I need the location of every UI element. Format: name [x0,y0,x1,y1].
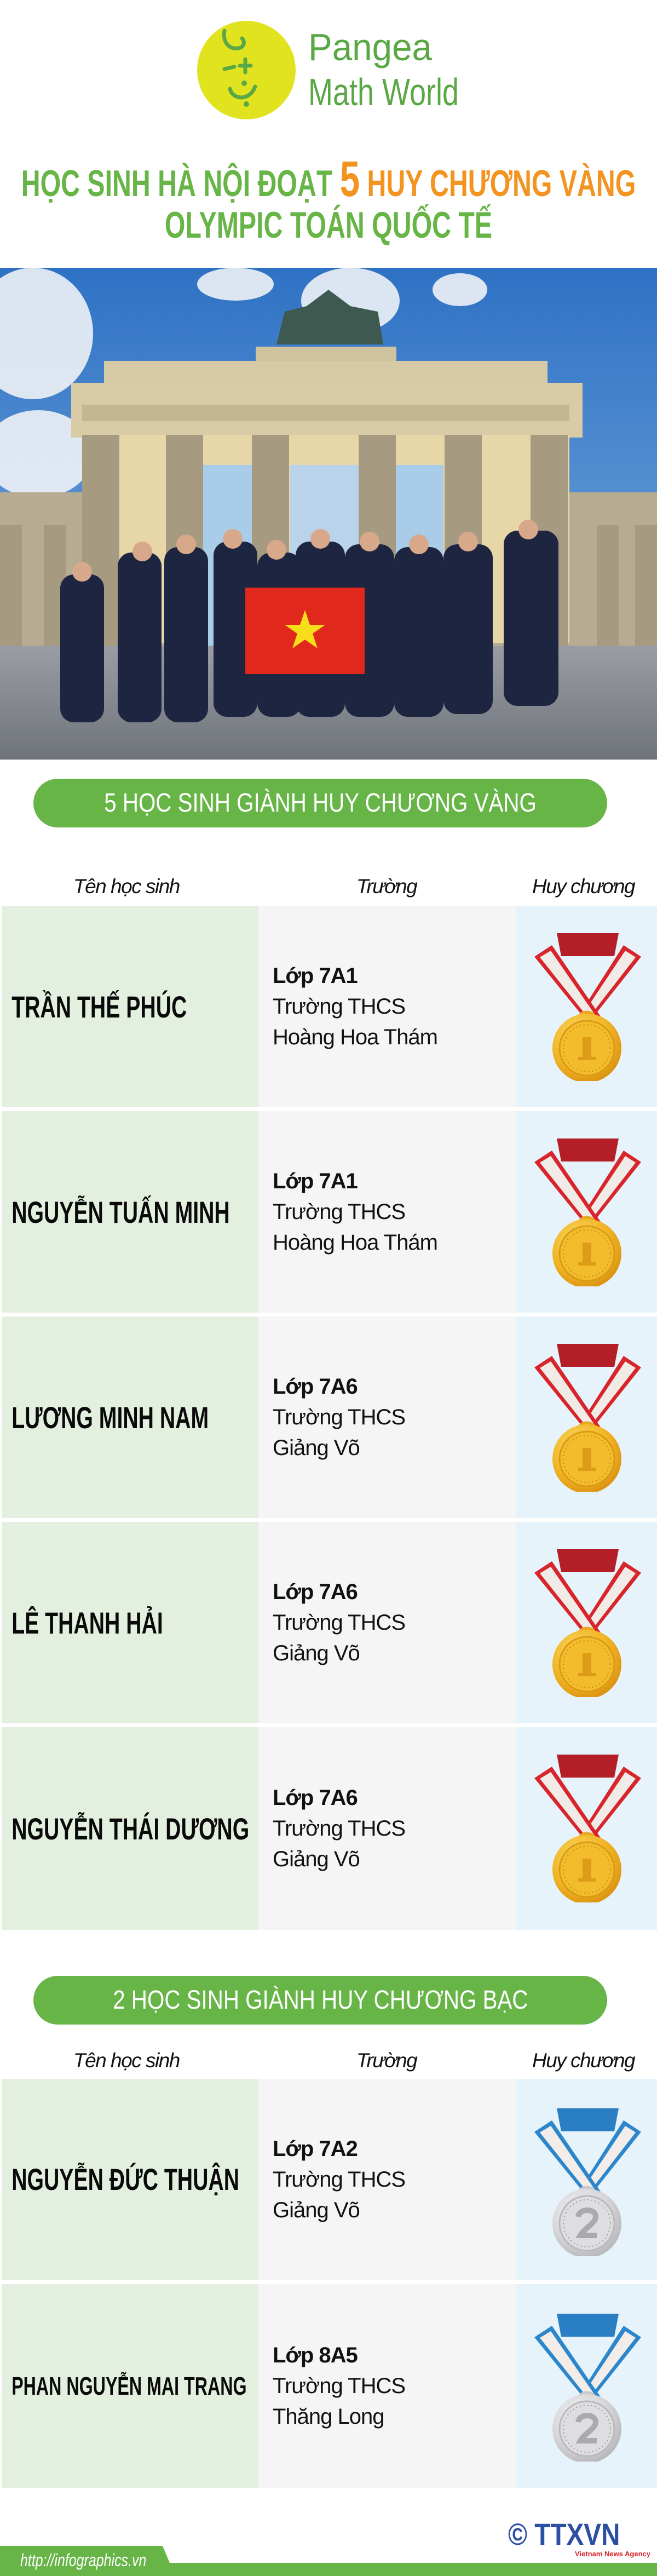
row: Nguyễn Thái Dương: NGUYỄN THÁI DƯƠNG [11,1812,249,1845]
row: Phan Nguyễn Mai Trang [2,2284,657,2488]
row: Trần Thế Phúc: TRẦN THẾ PHÚC [11,989,187,1024]
row: Phan Nguyễn Mai Trang: Lớp 8A5 [273,2343,358,2367]
row: Phan Nguyễn Mai Trang: Thăng Long [273,2405,384,2429]
table header: silver: Huy chương [532,2049,635,2072]
footer tab: website: http://infographics.vn [20,2550,146,2570]
row: Lương Minh Nam: Trường THCS [273,1405,405,1429]
row: Nguyễn Đức Thuận: Trường THCS [273,2167,405,2192]
logo text [308,26,459,113]
icon: gold medal [516,1522,657,1723]
row: Nguyễn Đức Thuận: NGUYỄN ĐỨC THUẬN [11,2162,239,2196]
row: Nguyễn Tuấn Minh [2,1111,657,1313]
row: Lương Minh Nam: Giảng Võ [273,1436,360,1460]
table header: gold: Huy chương [532,875,635,898]
row: Nguyễn Thái Dương [2,1727,657,1930]
logo: TTXVN: © TTXVN [508,2517,620,2551]
footer bar [0,2563,657,2576]
row: Lê Thanh Hải: LÊ THANH HẢI [11,1606,163,1640]
icon: gold medal [516,1727,657,1930]
row: Nguyễn Thái Dương: Trường THCS [273,1816,405,1841]
row: Lê Thanh Hải: Lớp 7A6 [273,1580,358,1604]
icon: gold medal [516,1316,657,1518]
row: Lương Minh Nam [2,1316,657,1518]
table header: gold: Trường [356,875,417,898]
logo: TTXVN [508,2517,650,2558]
table header: gold [73,875,635,898]
row: Nguyễn Thái Dương: Giảng Võ [273,1847,360,1871]
row: Trần Thế Phúc: Lớp 7A1 [273,964,358,988]
table header: silver [73,2049,635,2072]
table header: silver: Tên học sinh [73,2049,180,2072]
table header: silver: Trường [356,2049,417,2072]
row: Nguyễn Thái Dương: Lớp 7A6 [273,1786,358,1810]
row: Nguyễn Tuấn Minh: Lớp 7A1 [273,1169,358,1193]
row: Lương Minh Nam: LƯƠNG MINH NAM [11,1400,209,1435]
icon: smiley math circle [197,21,296,119]
logo: TTXVN: Vietnam News Agency [575,2550,650,2558]
icon: silver medal [516,2284,657,2488]
section pill: gold [33,779,607,827]
photo: students at Brandenburg Gate [0,268,657,760]
row: Lương Minh Nam: Lớp 7A6 [273,1375,358,1399]
title: OLYMPIC TOÁN QUỐC TẾ [165,204,492,246]
section pill: silver [33,1976,607,2025]
section pill: silver: 2 HỌC SINH GIÀNH HUY CHƯƠNG BẠC [113,1986,528,2015]
footer tab: website [0,2546,170,2569]
row: Lê Thanh Hải: Trường THCS [273,1611,405,1635]
row: Phan Nguyễn Mai Trang: Trường THCS [273,2374,405,2398]
row: Nguyễn Đức Thuận: Lớp 7A2 [273,2137,358,2161]
icon: gold medal [516,1111,657,1313]
title: HỌC SINH HÀ NỘI ĐOẠT 5 HUY CHƯƠNG VÀNG [21,151,636,207]
row: Nguyễn Đức Thuận: Giảng Võ [273,2198,360,2222]
table header: gold: Tên học sinh [73,875,180,898]
row: Trần Thế Phúc: Trường THCS [273,994,405,1019]
logo: Pangea Math World [197,21,459,119]
logo text: Pangea [308,26,432,68]
row: Phan Nguyễn Mai Trang: PHAN NGUYỄN MAI TRANG [11,2372,247,2400]
row: Trần Thế Phúc: Hoàng Hoa Thám [273,1025,437,1049]
title [21,151,636,246]
row: Lê Thanh Hải: Giảng Võ [273,1641,360,1665]
section pill: gold: 5 HỌC SINH GIÀNH HUY CHƯƠNG VÀNG [104,789,537,818]
row: Nguyễn Tuấn Minh: NGUYỄN TUẤN MINH [11,1195,230,1229]
row: Trần Thế Phúc [2,906,657,1107]
icon: gold medal [516,906,657,1107]
row: Nguyễn Đức Thuận [2,2079,657,2280]
row: Nguyễn Tuấn Minh: Trường THCS [273,1200,405,1224]
icon: silver medal [516,2079,657,2280]
row: Nguyễn Tuấn Minh: Hoàng Hoa Thám [273,1231,437,1255]
row: Lê Thanh Hải [2,1522,657,1723]
